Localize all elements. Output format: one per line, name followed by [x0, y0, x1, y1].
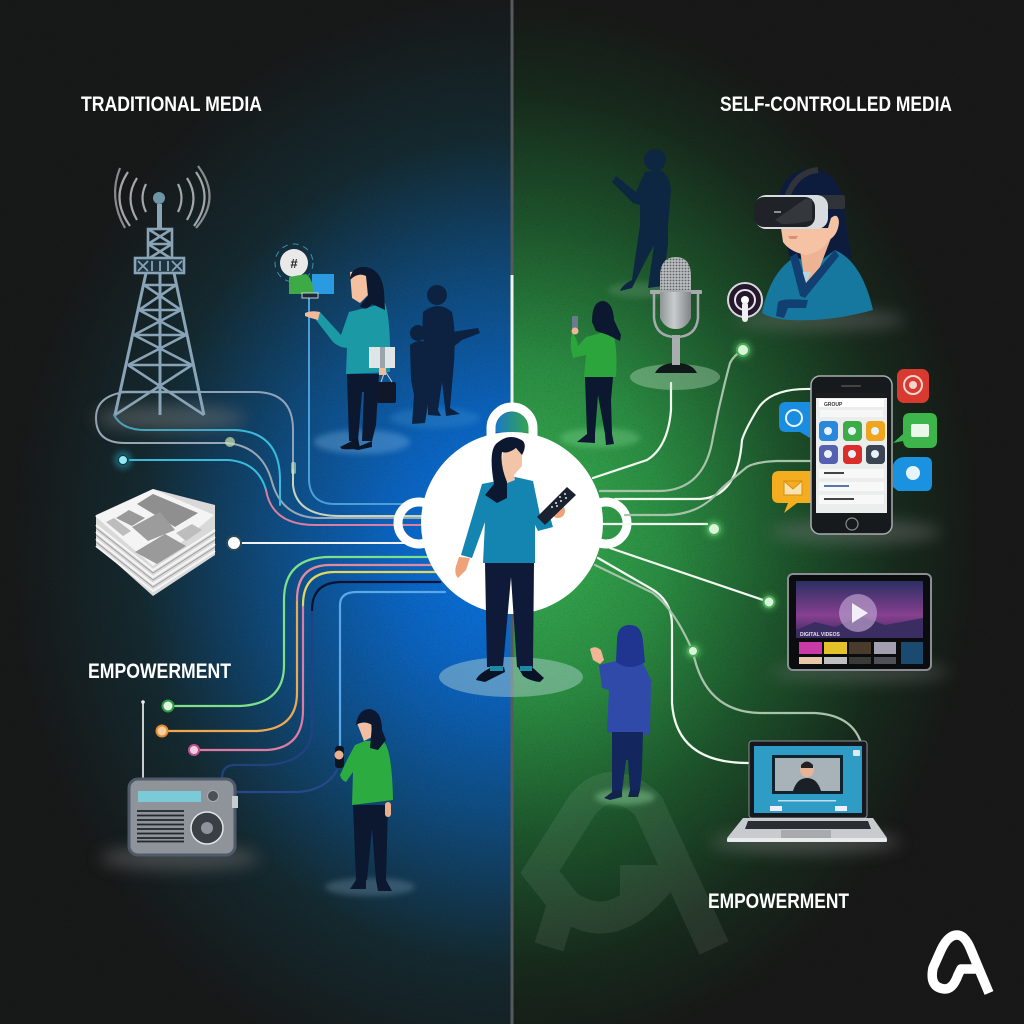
- phone body: [811, 376, 892, 534]
- icon: radio: [100, 700, 260, 870]
- label: empowerment left: EMPOWERMENT: [88, 660, 231, 683]
- label: empowerment right: EMPOWERMENT: [708, 890, 849, 913]
- center divider: [510, 0, 514, 1024]
- remote: [537, 487, 576, 525]
- app bubble: red podcast: [897, 369, 929, 403]
- figure: woman with phone (left bottom): [325, 709, 415, 896]
- app bubble: blue bird: [893, 457, 932, 491]
- icon: smartphone with app bubbles: GROUP: [824, 402, 843, 408]
- hub: central figure with remote: [421, 432, 603, 697]
- icon: tablet with video: [770, 574, 950, 682]
- figure: woman with remote card: #: [290, 256, 298, 271]
- connector lines: right: [593, 350, 860, 763]
- figure: woman with remote card: [275, 244, 410, 454]
- figure: silhouette (top right): [608, 149, 672, 298]
- icon: tablet with video: DIGITAL VIDEOS: [800, 632, 840, 638]
- heading: traditional media: TRADITIONAL MEDIA: [81, 93, 262, 116]
- legs: [485, 563, 534, 667]
- connector nodes: right: [685, 341, 777, 659]
- torso and arms: [461, 477, 553, 563]
- icon: laptop with video call: [710, 741, 900, 853]
- app bubble: blue g: [779, 402, 810, 438]
- logo mark: [932, 935, 989, 993]
- connector lines: left: [96, 297, 445, 792]
- figure: silhouette pair: [390, 285, 480, 428]
- figure: woman in green with phone: [560, 301, 640, 448]
- icon: studio microphone: [630, 257, 720, 390]
- heading: self-controlled media: SELF-CONTROLLED MEDIA: [720, 93, 952, 116]
- head and hair: [501, 448, 522, 484]
- connector nodes: left: [114, 437, 296, 755]
- icon: vr headset person: [728, 169, 905, 330]
- figure: woman in blue with hijab: [590, 625, 655, 805]
- icon: newspaper stack: [95, 489, 215, 596]
- app bubble: green chat: [893, 413, 937, 448]
- connecting hub rings: [398, 407, 627, 544]
- app bubble: yellow mail: [772, 471, 812, 513]
- icon: broadcast tower: [95, 166, 245, 431]
- icon: smartphone with app bubbles: [770, 369, 940, 544]
- watermark logo: [540, 788, 714, 948]
